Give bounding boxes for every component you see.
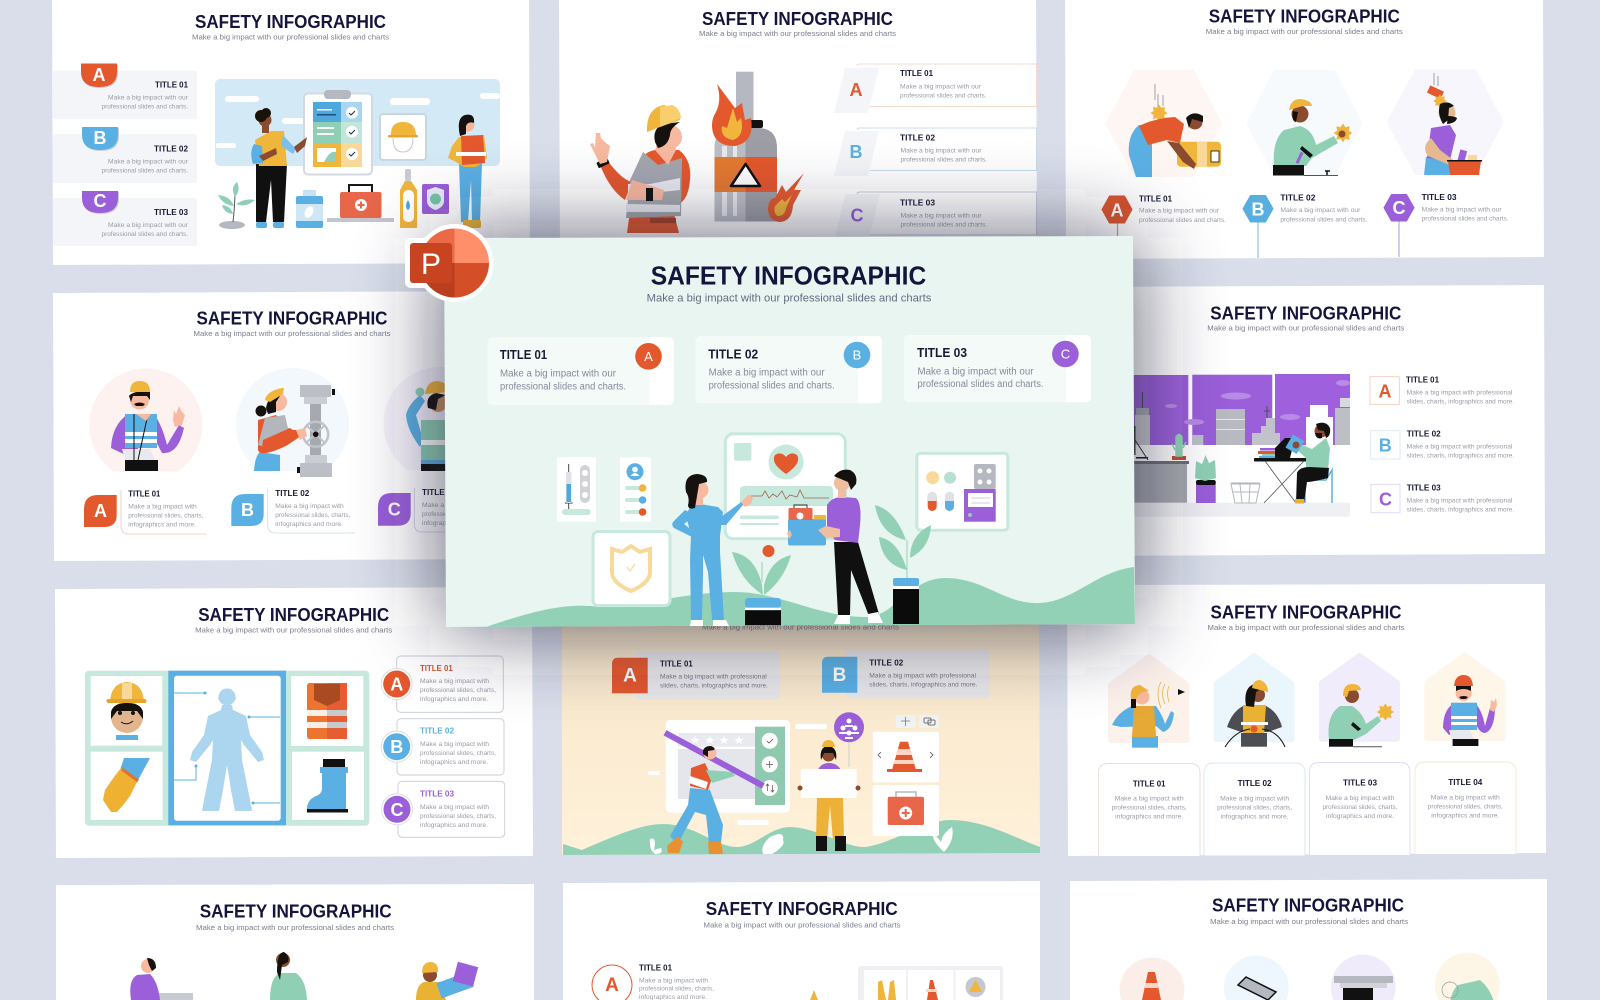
item B: Make a big impact with our: [1280, 208, 1360, 214]
list item B: professional slides and charts.: [900, 158, 987, 164]
heading: SAFETY INFOGRAPHIC: [198, 605, 389, 625]
card 04: [1415, 762, 1516, 854]
card: syringe: [557, 457, 596, 522]
item A: TITLE 01: [639, 963, 672, 973]
item C: TITLE 03: [1422, 192, 1457, 202]
icon: cctv circle: [1331, 955, 1396, 1000]
panel: central featured slide: [444, 236, 1135, 627]
item C: professional slides and charts.: [1422, 217, 1509, 223]
icon: traffic cone circle: [1120, 958, 1184, 1000]
panel: PPE tiles: [810, 966, 1003, 1000]
item A: [612, 651, 780, 699]
item B: slides, charts, infographics and more.: [869, 683, 978, 689]
list item A: A: [92, 65, 106, 85]
list card A: A: [390, 674, 403, 694]
icon: glove: [103, 758, 150, 812]
item B: B: [833, 665, 846, 686]
card: health monitor: [725, 434, 845, 539]
slide: top right injuries: [1065, 0, 1544, 259]
illustration: clipboard: [304, 90, 372, 174]
item C: Make a big impact with our: [1422, 207, 1502, 213]
card B: B: [853, 348, 861, 363]
list item A: professional slides and charts.: [102, 105, 188, 111]
card 01: infographics and more.: [1115, 815, 1184, 821]
item B: Make a big impact with professional: [869, 674, 976, 680]
slide: bottom left: [56, 884, 534, 1000]
list item C: [835, 192, 1036, 239]
item C: TITLE 03: [422, 487, 456, 497]
card A: Make a big impact with our: [500, 369, 617, 380]
list item B: [834, 128, 1036, 176]
hexagon figure: falling brick: [1390, 72, 1500, 175]
item A: TITLE 01: [1139, 193, 1172, 203]
item A: professional slides, charts,: [128, 514, 204, 520]
hexagon figure: back injury: [1108, 73, 1221, 177]
card B: professional slides and charts.: [709, 381, 835, 392]
subtitle: Make a big impact with our professional slides and charts: [702, 622, 899, 631]
heading: SAFETY INFOGRAPHIC: [196, 308, 388, 328]
house figure: woman with cable: [1217, 656, 1292, 747]
icon: worker silhouette with connectors: [174, 688, 280, 811]
list card C: Make a big impact with: [420, 805, 489, 811]
card A: A: [644, 349, 653, 364]
panel: traffic cone: [873, 715, 939, 782]
list item B: Make a big impact with our: [900, 148, 982, 154]
list card A: professional slides, charts,: [420, 688, 496, 694]
item C: infographics and more.: [422, 521, 490, 527]
white leaves: [650, 827, 953, 854]
heading: SAFETY INFOGRAPHIC: [651, 260, 926, 290]
heading: SAFETY INFOGRAPHIC: [706, 899, 898, 919]
heading: SAFETY INFOGRAPHIC: [1209, 7, 1400, 27]
illustration: gas tank: [715, 72, 777, 222]
icon: helmet head: [106, 682, 146, 740]
item B: slides, charts, infographics and more.: [1407, 453, 1515, 459]
card 01: [1098, 764, 1200, 856]
figure: worker with box: [416, 962, 478, 1000]
hexagon figure: hammer injury: [1250, 73, 1359, 176]
item C: Make a big impact with: [422, 503, 490, 509]
figure: worker raising hand: [590, 105, 690, 233]
subtitle: Make a big impact with our professional slides and charts: [704, 920, 901, 929]
icon: first aid kit: [327, 185, 394, 222]
item A: A: [1378, 382, 1392, 402]
item C: [378, 487, 500, 532]
item B: Make a big impact with: [275, 504, 344, 510]
heading: SAFETY INFOGRAPHIC: [1210, 303, 1401, 323]
subtitle: Make a big impact with our professional slides and charts: [194, 329, 391, 338]
list item C: TITLE 03: [900, 197, 935, 207]
card 02: infographics and more.: [1221, 815, 1289, 821]
list item A: Make a big impact with our: [900, 84, 981, 90]
slide: bottom right: [1070, 879, 1547, 1000]
list item A: professional slides and charts.: [900, 93, 987, 99]
subtitle: Make a big impact with our professional slides and charts: [699, 29, 896, 38]
list card C: professional slides, charts,: [420, 814, 496, 820]
item A: Make a big impact with our: [1139, 209, 1219, 215]
slide: bottom centre: [563, 881, 1040, 1000]
item B: TITLE 02: [275, 488, 310, 498]
list item C: Make a big impact with our: [108, 223, 188, 229]
item A: Make a big impact with professional: [1407, 391, 1512, 397]
list item B: TITLE 02: [900, 133, 935, 143]
item A: [84, 489, 207, 534]
slide: middle left workers in circles: [53, 291, 531, 561]
item A: infographics and more.: [128, 523, 196, 529]
card C: professional slides and charts.: [918, 379, 1044, 390]
item A: [592, 963, 714, 1000]
hills: [563, 820, 1040, 855]
list item A: [834, 64, 1036, 113]
icon: warning triangle: [731, 164, 760, 186]
illustration: browser window: [648, 720, 827, 825]
list card B: Make a big impact with: [420, 742, 489, 748]
list item B: Make a big impact with our: [108, 160, 188, 166]
illustration: windows and skyline: [1100, 374, 1350, 445]
figure: man pointing: [251, 108, 307, 228]
item B: B: [241, 500, 254, 520]
card 02: [1204, 763, 1305, 856]
list card A: Make a big impact with: [420, 679, 489, 685]
list item B: B: [850, 142, 862, 162]
list card B: infographics and more.: [420, 760, 488, 766]
subtitle: Make a big impact with our professional slides and charts: [1210, 917, 1408, 926]
card 03: professional slides, charts,: [1322, 805, 1398, 811]
heading: SAFETY INFOGRAPHIC: [1210, 603, 1402, 623]
card 01: TITLE 01: [1133, 779, 1166, 789]
item A: [1102, 193, 1226, 238]
slide: lower left PPE diagram: [55, 587, 533, 858]
list item B: [53, 127, 197, 183]
card B: TITLE 02: [708, 347, 758, 361]
card C: Make a big impact with our: [918, 366, 1034, 377]
house figure: man with hammer: [1322, 656, 1397, 747]
card 02: professional slides, charts,: [1217, 806, 1292, 812]
list item A: [53, 64, 197, 119]
list item C: TITLE 03: [154, 207, 188, 217]
icon: spray: [400, 169, 417, 228]
card 04: Make a big impact with: [1431, 796, 1500, 802]
item B: Make a big impact with professional: [1407, 445, 1512, 451]
list item C: C: [94, 191, 106, 211]
subtitle: Make a big impact with our professional slides and charts: [195, 626, 392, 635]
item B: professional slides, charts,: [275, 513, 351, 519]
item A: [1370, 374, 1515, 405]
card B: Make a big impact with our: [709, 368, 825, 379]
item A: A: [94, 501, 107, 521]
list item A: TITLE 01: [900, 68, 933, 78]
card 01: Make a big impact with: [1115, 797, 1184, 803]
list item C: [53, 191, 197, 246]
figure: worker carrying beam: [665, 733, 763, 854]
icon: face mask circle: [1435, 953, 1500, 1000]
circle figure: worker at valve: [236, 368, 349, 477]
figure: man in purple with kit: [787, 470, 883, 624]
card A: [487, 337, 674, 405]
card 03: [1310, 762, 1410, 855]
icon: helmet card: [380, 114, 426, 160]
list card B: [381, 719, 504, 775]
figure: man reading at table: [1254, 423, 1332, 504]
subtitle: Make a big impact with our professional slides and charts: [1207, 324, 1405, 333]
card A: TITLE 01: [500, 348, 547, 362]
panel: first aid kit: [873, 785, 939, 836]
card 03: Make a big impact with: [1326, 796, 1394, 802]
list item B: professional slides and charts.: [102, 168, 188, 174]
heading: SAFETY INFOGRAPHIC: [702, 9, 893, 29]
card A: professional slides and charts.: [500, 381, 626, 392]
item A: professional slides and charts.: [1139, 218, 1226, 224]
item A: slides, charts, infographics and more.: [1407, 399, 1515, 405]
list card A: infographics and more.: [420, 697, 488, 703]
list item C: professional slides and charts.: [900, 223, 987, 229]
icon: PowerPoint logo: [405, 224, 494, 302]
item B: [1243, 193, 1368, 258]
list item B: TITLE 02: [154, 144, 188, 154]
list card C: C: [390, 800, 404, 820]
icon: flower pot: [732, 545, 791, 625]
icon: small flame: [768, 173, 804, 222]
item C: slides, charts, infographics and more.: [1407, 508, 1515, 514]
item C: C: [1379, 490, 1392, 510]
item C: professional slides, charts,: [422, 512, 497, 518]
subtitle: Make a big impact with our professional slides and charts: [1206, 27, 1403, 36]
illustration: sky panel: [215, 79, 500, 166]
central slide drop shadow: [444, 238, 1134, 626]
list item A: TITLE 01: [155, 80, 188, 90]
icon: PowerPoint logo: P: [421, 248, 441, 281]
icon: leafy plant: [875, 505, 931, 624]
item A: Make a big impact with: [639, 979, 708, 985]
subtitle: Make a big impact with our professional slides and charts: [196, 923, 394, 932]
card 04: infographics and more.: [1431, 814, 1500, 820]
figure: woman in green: [270, 952, 307, 1000]
card 02: Make a big impact with: [1220, 797, 1289, 803]
list card B: TITLE 02: [420, 726, 454, 736]
heading: SAFETY INFOGRAPHIC: [200, 902, 392, 922]
item A: professional slides, charts,: [639, 987, 714, 993]
card: user list: [620, 457, 651, 522]
icon: potted plant: [218, 182, 255, 229]
list item A: Make a big impact with our: [108, 96, 188, 102]
list item A: A: [850, 80, 862, 100]
icon: big flame: [712, 84, 752, 146]
heading: SAFETY INFOGRAPHIC: [1212, 896, 1404, 916]
item B: TITLE 02: [1407, 428, 1441, 438]
list item C: Make a big impact with our: [900, 213, 982, 219]
circle figure: worker adjusting helmet: [384, 367, 496, 471]
item A: A: [605, 975, 619, 996]
list card C: TITLE 03: [420, 789, 454, 799]
list item B: B: [94, 128, 106, 148]
subtitle: Make a big impact with our professional slides and charts: [647, 293, 932, 305]
circle figure: worker waving: [89, 368, 202, 472]
item C: TITLE 03: [1407, 482, 1441, 492]
illustration: desk and cactus: [1100, 426, 1189, 503]
icon: boot: [307, 759, 348, 812]
card 04: professional slides, charts,: [1428, 804, 1503, 810]
item C: Make a big impact with professional: [1407, 499, 1512, 505]
card 04: TITLE 04: [1448, 777, 1483, 787]
list card A: [381, 656, 503, 712]
list item C: C: [850, 206, 864, 226]
card 03: TITLE 03: [1343, 777, 1377, 787]
slide: lower centre construction: [562, 588, 1040, 855]
item A: slides, charts, infographics and more.: [660, 684, 768, 690]
item A: TITLE 01: [128, 489, 161, 499]
item B: [231, 488, 355, 533]
figure: woman in overalls: [672, 474, 753, 626]
item A: Make a big impact with: [128, 505, 197, 511]
item A: TITLE 01: [1406, 374, 1439, 384]
card 02: TITLE 02: [1238, 778, 1272, 788]
subtitle: Make a big impact with our professional slides and charts: [1208, 623, 1405, 632]
icon: camera circle: [1224, 956, 1289, 1000]
house figure: woman on phone: [1111, 657, 1186, 748]
item B: B: [1379, 436, 1392, 456]
slide: top centre fire hazard: [559, 0, 1037, 262]
card: shield: [593, 532, 670, 606]
item B: TITLE 02: [869, 658, 904, 668]
PPE grid frame: [85, 671, 369, 826]
illustration: wavy ground: [446, 567, 1135, 627]
list card A: TITLE 01: [420, 663, 453, 673]
house figure: man waving: [1427, 656, 1503, 746]
list card B: B: [390, 737, 403, 757]
item B: B: [1252, 200, 1264, 220]
list card C: [382, 781, 505, 837]
icon: bottle: [296, 190, 323, 228]
item A: TITLE 01: [660, 659, 693, 669]
item B: TITLE 02: [1280, 193, 1316, 203]
subtitle: Make a big impact with our professional slides and charts: [192, 32, 389, 42]
list card C: infographics and more.: [420, 823, 488, 829]
illustration: wastebasket: [1231, 483, 1260, 503]
figure: woman in vest: [448, 115, 487, 228]
list item C: professional slides and charts.: [102, 232, 188, 238]
icon: shield card: [422, 184, 449, 214]
item A: A: [1110, 200, 1124, 220]
item B: infographics and more.: [275, 522, 343, 528]
item C: C: [1392, 198, 1406, 218]
card C: C: [1061, 347, 1070, 362]
item A: A: [623, 666, 637, 686]
item C: [1371, 482, 1515, 514]
card: pills: [917, 453, 1008, 530]
slide: middle right office: [1066, 285, 1545, 556]
card B: [695, 336, 882, 403]
illustration: potted plant: [1195, 455, 1216, 503]
card C: TITLE 03: [917, 346, 967, 360]
icon: team badge: [834, 712, 864, 767]
list card B: professional slides, charts,: [420, 751, 496, 757]
item A: Make a big impact with professional: [660, 675, 767, 681]
card 01: professional slides, charts,: [1112, 806, 1187, 812]
item C: C: [388, 500, 401, 520]
item B: [822, 649, 990, 698]
illustration: floor: [1100, 503, 1350, 517]
icon: safety vest: [307, 683, 347, 739]
slide: top left checklist: [52, 0, 530, 265]
item B: [1371, 428, 1515, 459]
figure: person on phone: [130, 958, 193, 1000]
slide: lower right four houses: [1067, 584, 1546, 856]
figure: woman with plan: [798, 740, 860, 851]
card 03: infographics and more.: [1326, 814, 1394, 820]
item B: professional slides and charts.: [1280, 217, 1368, 223]
card C: [904, 335, 1091, 402]
heading: SAFETY INFOGRAPHIC: [195, 12, 386, 32]
item C: [1384, 192, 1509, 257]
